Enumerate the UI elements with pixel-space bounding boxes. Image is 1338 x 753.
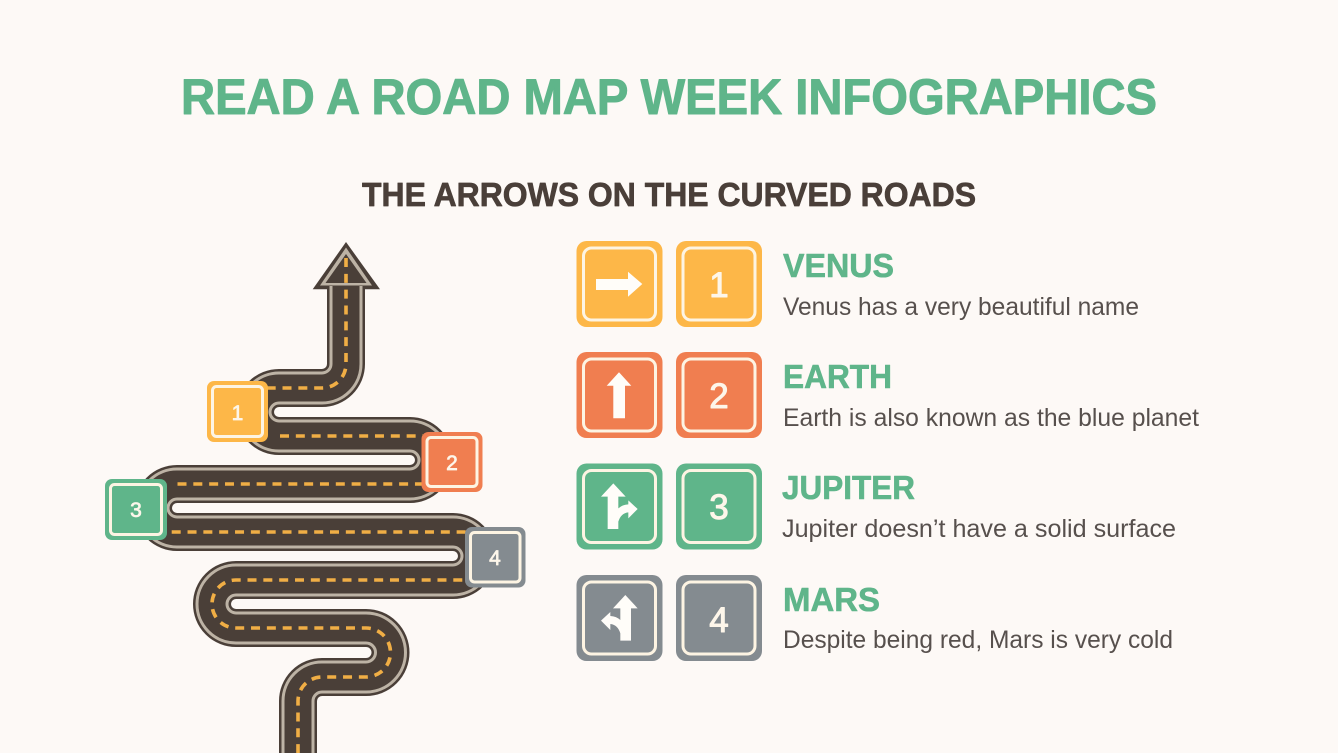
icon: left fork arrow sign — [576, 575, 662, 661]
icon: right arrow sign — [576, 241, 662, 327]
heading: Jupiter: JUPITER — [782, 469, 915, 506]
road sign 3: 3 — [130, 499, 142, 522]
winding road with arrow head — [153, 242, 477, 753]
number sign 4: 4 — [709, 601, 729, 640]
road sign 3 — [105, 479, 167, 540]
row: Earth — [576, 352, 1199, 438]
description: Venus: Venus has a very beautiful name — [783, 293, 1139, 321]
row: Mars — [576, 575, 1173, 661]
road sign 2: 2 — [446, 452, 458, 475]
heading: Earth: EARTH — [783, 358, 892, 395]
icon: straight up arrow sign — [576, 352, 662, 438]
road sign 1: 1 — [232, 402, 243, 425]
road sign 2 — [422, 432, 482, 492]
number sign 2 — [676, 352, 762, 438]
row: Jupiter — [576, 464, 1176, 550]
description: Earth: Earth is also known as the blue planet — [783, 404, 1199, 432]
title: READ A ROAD MAP WEEK INFOGRAPHICS — [181, 69, 1157, 125]
number sign 3 — [676, 464, 762, 550]
road sign 4 — [465, 527, 526, 588]
road sign 1 — [207, 381, 268, 442]
description: Jupiter: Jupiter doesn’t have a solid surface — [782, 515, 1176, 543]
number sign 1: 1 — [709, 266, 729, 305]
icon: right fork arrow sign — [576, 464, 662, 550]
number sign 4 — [676, 575, 762, 661]
description: Mars: Despite being red, Mars is very cold — [783, 626, 1173, 654]
subtitle: THE ARROWS ON THE CURVED ROADS — [362, 177, 976, 214]
number sign 1 — [676, 241, 762, 327]
heading: Mars: MARS — [783, 581, 880, 618]
heading: Venus: VENUS — [783, 247, 894, 284]
number sign 2: 2 — [709, 377, 729, 416]
row: Venus — [576, 241, 1139, 327]
road sign 4: 4 — [489, 547, 501, 570]
number sign 3: 3 — [709, 488, 729, 527]
